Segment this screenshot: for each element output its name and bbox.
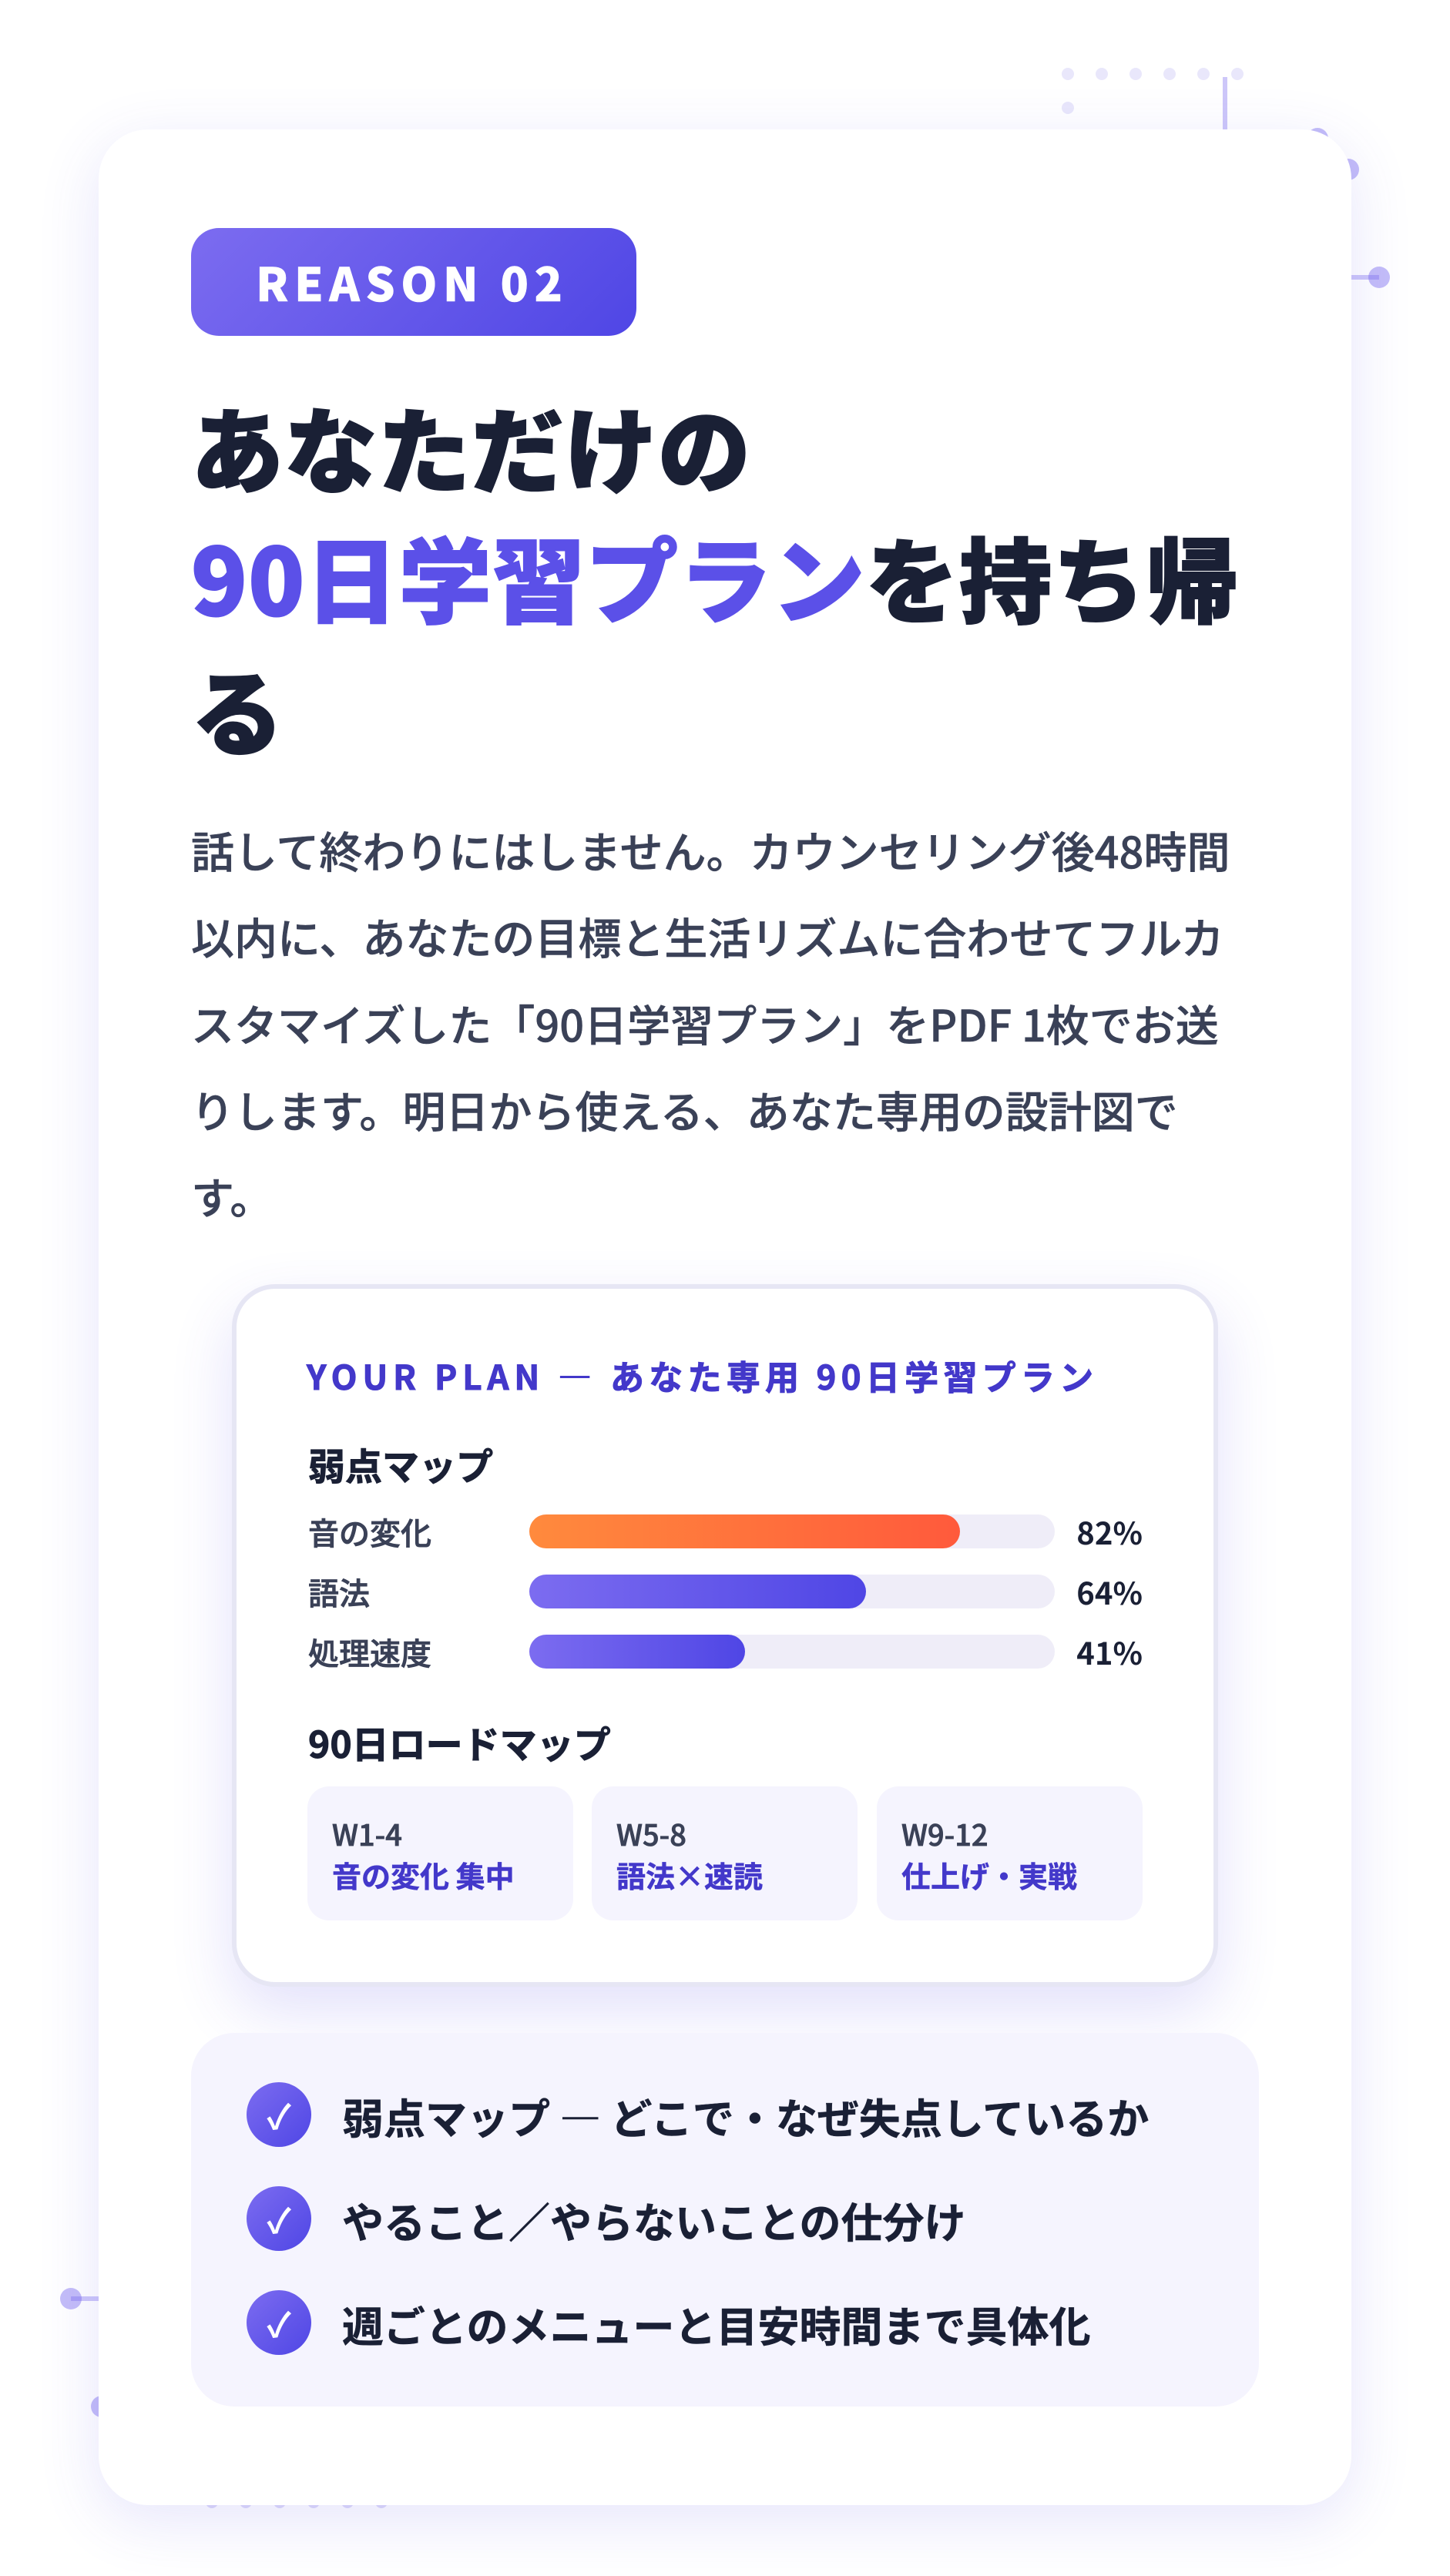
roadmap tile: W5-8: 語法×速読 — [616, 1853, 763, 1896]
heading: 90日学習プランを持ち帰 — [191, 508, 1240, 642]
panel: your plan card — [232, 1284, 1218, 1987]
bar chart: weakness map — [308, 1509, 1143, 1674]
icon: check — [247, 2082, 311, 2147]
decoration: dot grid top right — [1062, 68, 1244, 114]
roadmap tile: W5-8 — [592, 1786, 858, 1920]
roadmap tile: W9-12 — [877, 1786, 1143, 1920]
bar row: 語法 64% — [308, 1569, 1143, 1614]
roadmap tile: W1-4: W1-4 — [332, 1812, 402, 1854]
panel: main card — [99, 129, 1351, 2505]
heading — [191, 378, 1240, 775]
bar row: 語法 64%: 語法 — [308, 1569, 370, 1614]
heading: る — [191, 641, 284, 775]
checklist item 3: 週ごとのメニューと目安時間まで具体化 — [342, 2293, 1090, 2354]
body paragraph: 話して終わりにはしません。カウンセリング後48時間 — [191, 819, 1230, 881]
roadmap tile: W1-4: 音の変化 集中 — [332, 1853, 515, 1896]
plan card title: YOUR PLAN — あなた専用 90日学習プラン — [307, 1350, 1098, 1400]
checklist item 2: やること／やらないことの仕分け — [342, 2189, 965, 2250]
decoration: dot row bottom — [206, 2505, 387, 2508]
decoration: connector lines and nodes bottom left — [60, 2288, 99, 2417]
body paragraph: りします。明日から使える、あなた専用の設計図で — [191, 1078, 1178, 1141]
body paragraph: 以内に、あなたの目標と生活リズムに合わせてフルカ — [191, 905, 1224, 968]
icon: check: ✓ — [267, 2298, 291, 2347]
badge: REASON 02 — [191, 228, 636, 336]
icon: check — [247, 2290, 311, 2355]
icon: check — [247, 2186, 311, 2251]
roadmap tile: W9-12: 仕上げ・実戦 — [901, 1853, 1077, 1896]
body paragraph: す。 — [191, 1165, 273, 1227]
decoration: connector lines and nodes top right — [1223, 77, 1390, 288]
bar row: 処理速度 41% — [308, 1629, 1143, 1674]
bar row: 音の変化 82%: 音の変化 — [308, 1509, 431, 1554]
panel: checklist — [191, 2033, 1259, 2407]
subheading: 90-day roadmap: 90日ロードマップ — [308, 1715, 611, 1769]
bar row: 語法 64%: 64% — [1076, 1569, 1143, 1614]
badge: REASON 02: REASON 02 — [256, 248, 569, 315]
checklist item 1: 弱点マップ — どこで・なぜ失点しているか — [342, 2085, 1149, 2146]
icon: check: ✓ — [267, 2090, 291, 2139]
roadmap tile: W1-4 — [307, 1786, 573, 1920]
roadmap tile: W9-12: W9-12 — [901, 1812, 988, 1854]
bar row: 処理速度 41%: 41% — [1076, 1629, 1143, 1674]
body paragraph: スタマイズした「90日学習プラン」をPDF 1枚でお送 — [191, 992, 1219, 1055]
body paragraph — [191, 819, 1230, 1227]
bar row: 音の変化 82%: 82% — [1076, 1509, 1143, 1554]
roadmap tile: W5-8: W5-8 — [616, 1812, 686, 1854]
heading: あなただけの — [191, 378, 751, 512]
subheading: weakness map: 弱点マップ — [308, 1437, 493, 1491]
bar row: 音の変化 82% — [308, 1509, 1143, 1554]
bar row: 処理速度 41%: 処理速度 — [308, 1629, 431, 1674]
icon: check: ✓ — [267, 2194, 291, 2243]
